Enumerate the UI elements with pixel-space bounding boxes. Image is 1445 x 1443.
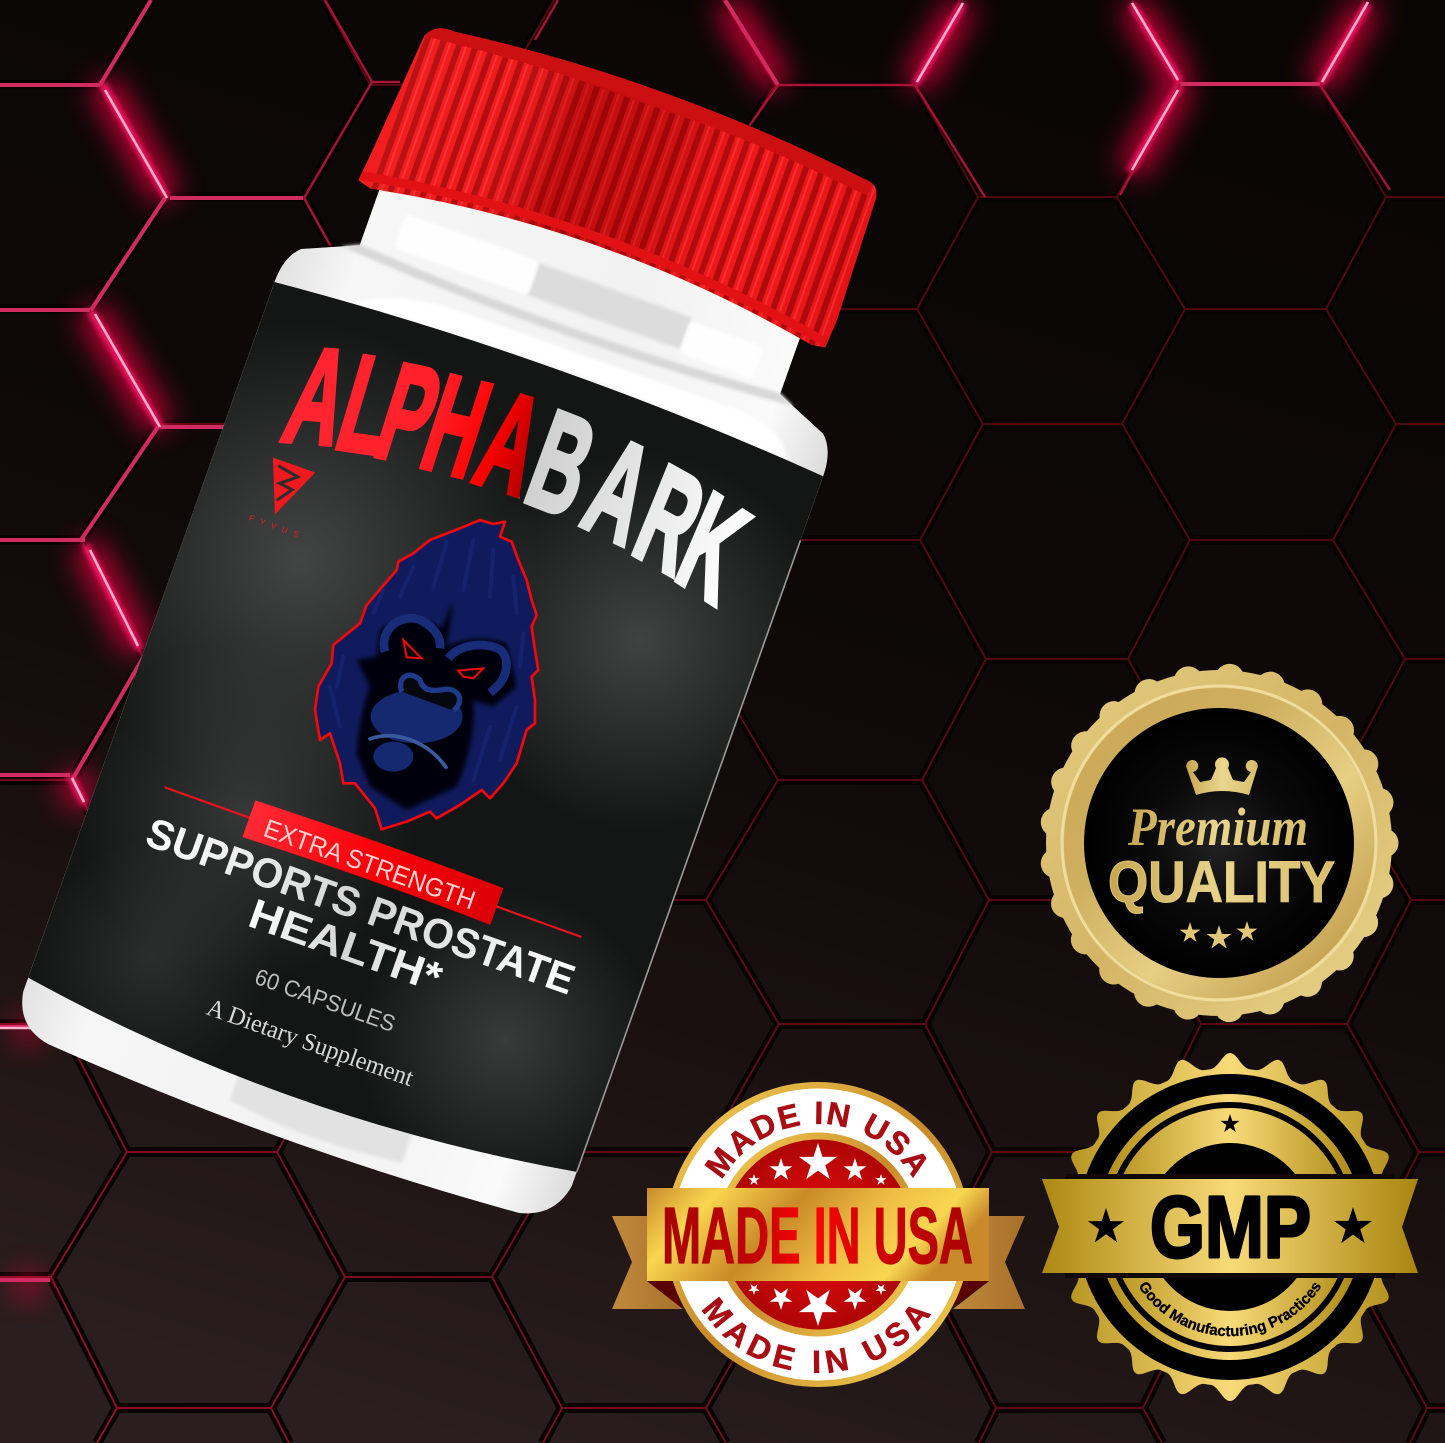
extra strength band: EXTRA STRENGTH (260, 813, 479, 915)
white stars (748, 1143, 887, 1326)
FYVUS logo: FYVUS (248, 513, 300, 539)
gorilla fur streaks (330, 540, 523, 780)
FYVUS logo (248, 457, 320, 539)
badge: GMP (1042, 1053, 1418, 1401)
ribbon text: MADE IN USA (662, 1191, 973, 1280)
neck and shoulder highlights (58, 197, 821, 1211)
brand name: ALPHABARK: ALPHABARK (257, 292, 779, 637)
crown icon (1186, 757, 1258, 795)
label edge highlight (577, 540, 800, 1172)
product bottle (22, 28, 876, 1214)
curved text top: MADE IN USA (704, 1102, 926, 1179)
gold ribbon (1042, 1174, 1418, 1278)
quality text: QUALITY (1108, 850, 1335, 915)
top star (1220, 1114, 1240, 1132)
three stars (1180, 921, 1257, 949)
badge: made in USA (612, 1082, 1025, 1387)
red cap (358, 28, 876, 348)
gold ribbon (647, 1188, 989, 1281)
GMP text: GMP (1150, 1179, 1311, 1276)
ribbon stars (1088, 1207, 1372, 1243)
gorilla face shadows (357, 600, 517, 810)
scalloped gold edge (1046, 670, 1392, 1016)
gorilla mascot (315, 520, 538, 829)
dietary supplement line: A Dietary Supplement (203, 994, 417, 1092)
curved practices text: Good Manufacturing Practices (1140, 1282, 1321, 1336)
bottle label (28, 282, 823, 1172)
capsule count: 60 CAPSULES (252, 963, 399, 1037)
curved text bottom: MADE IN USA (702, 1296, 932, 1374)
thin red rule (164, 787, 582, 937)
ribbon tails (612, 1216, 1025, 1309)
premium script text: Premium (1127, 797, 1308, 857)
bottle body (6, 139, 874, 1235)
gold seal (1071, 1053, 1389, 1401)
badge: premium quality (1046, 670, 1392, 1016)
claim: supports prostate health: HEALTH* (243, 890, 449, 1001)
claim: supports prostate health: SUPPORTS PROSTATE (140, 809, 581, 1003)
